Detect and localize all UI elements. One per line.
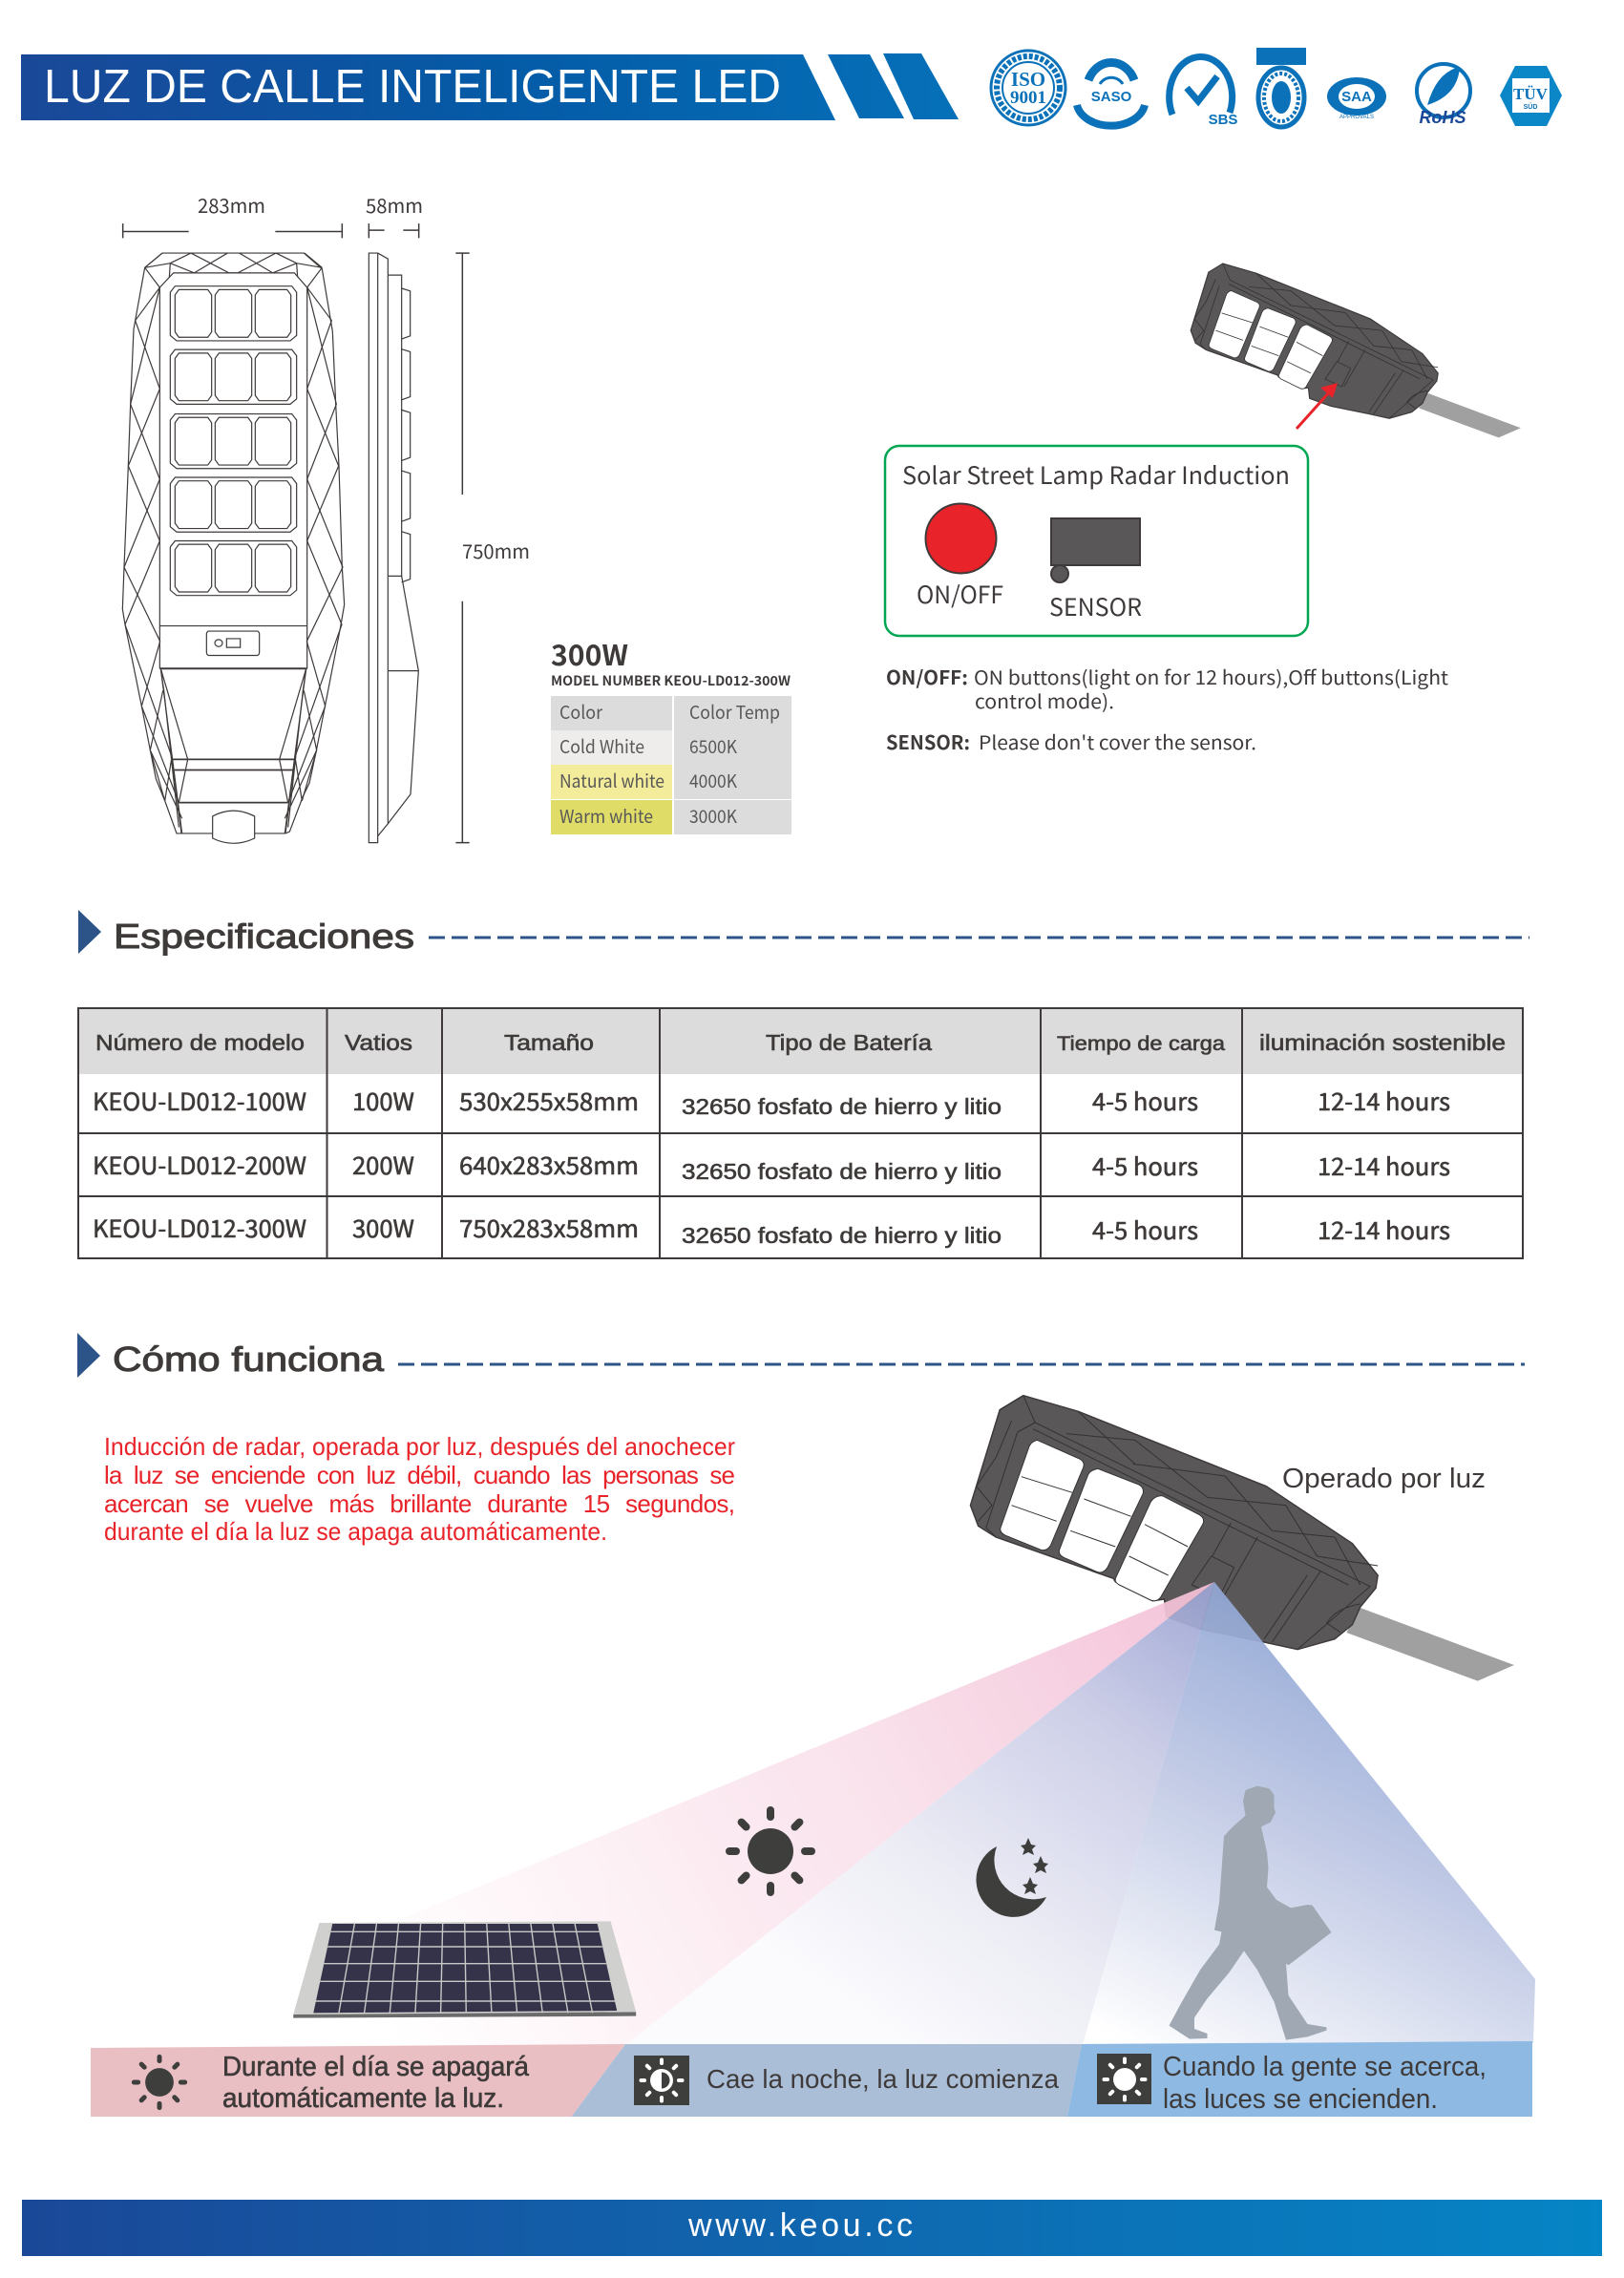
table row 200W: 640x283x58mm [459,1148,639,1182]
table cells: Color [559,699,603,725]
table cells: 4000K [689,768,738,793]
lamp pole [1346,1608,1514,1681]
red description paragraph: acercan se vuelve más brillante durante 15 segundos, [104,1489,735,1518]
button notes: ON/OFF: [886,663,968,690]
red arrow [1297,383,1338,429]
operated by light label: Operado por luz [1282,1464,1486,1494]
beam: day pink [90,1582,1214,2048]
lamp body [970,1396,1378,1650]
caption band: day: Durante el día se apagará [222,2052,530,2082]
certification logos [991,48,1562,128]
solar panel [293,1921,636,2018]
dimension label 58mm: 58mm [366,191,423,219]
logo: SAA: SAA [1341,89,1372,105]
on/off button [926,504,997,573]
dimension label 283mm: 283mm [198,191,265,219]
side view [369,253,418,843]
beam: dusk lavender [625,1582,1214,2045]
sensor label: SENSOR [1049,589,1142,623]
table header row: Número de modelo [95,1030,305,1055]
header title: LUZ DE CALLE INTELIGENTE LED [44,61,781,113]
section heading: especificaciones: Especificaciones [114,917,414,956]
table header row [95,1030,1506,1055]
logo: SBS check: SBS [1209,112,1237,128]
icon: moon and stars [976,1838,1048,1917]
caption band: people approach: Cuando la gente se acerca, [1163,2052,1487,2082]
table row 200W [93,1148,1450,1184]
table header background [78,1008,1523,1074]
logo: TUV [1500,66,1562,126]
table header row: Tiempo de carga [1057,1033,1225,1055]
sensor icon [1051,518,1140,582]
table row 100W [93,1084,1450,1119]
logo: RoHS [1417,64,1470,127]
walking person with briefcase [1169,1786,1331,2040]
logo: SBS check [1170,57,1237,128]
lamp line drawings [122,223,470,843]
table header row: iluminación sostenible [1259,1030,1506,1055]
dimension lines [123,223,470,843]
caption band: day: automáticamente la luz. [222,2083,504,2114]
logo: TUV: SÜD [1524,102,1537,111]
logo: seal with blue tab [1256,48,1306,127]
table row 300W: 4-5 hours [1092,1213,1198,1247]
front view [122,253,345,843]
button notes: SENSOR: [886,728,970,755]
table row 100W: 530x255x58mm [459,1084,639,1118]
red description paragraph: durante el día la luz se apaga automáticamente. [104,1517,607,1546]
caption band: people approach: las luces se encienden. [1163,2084,1438,2115]
table header row: Tamaño [504,1030,594,1055]
footer bar [22,2200,1602,2256]
footer bar: www.keou.cc [687,2207,913,2244]
logo: ISO 9001: 9001 [1010,88,1046,108]
sensor window [1192,1556,1234,1597]
table cells: Warm white [559,803,653,829]
table row 100W: 32650 fosfato de hierro y litio [682,1094,1002,1119]
table row 100W: KEOU-LD012-100W [93,1084,306,1118]
icon: small sun [132,2055,187,2110]
icon: big sun [726,1806,815,1896]
red description paragraph [104,1432,735,1546]
caption band: people approach [1067,2041,1532,2117]
table row 300W: 750x283x58mm [459,1211,639,1245]
section heading: como funciona: Cómo funciona [113,1339,385,1379]
logo: TUV: TÜV [1513,85,1549,103]
table row 200W: 200W [352,1148,414,1182]
logo: ISO 9001 [991,51,1065,125]
header banner [21,53,959,120]
table row 200W: 4-5 hours [1092,1149,1198,1183]
light beams [90,1582,1535,2048]
button notes: ON buttons(light on for 12 hours),Off buttons(Light [974,663,1448,690]
icon: bright sun [1097,2054,1151,2104]
caption band: dusk: Cae la noche, la luz comienza [707,2064,1059,2094]
on/off label: ON/OFF [917,577,1003,611]
table cells: Natural white [559,768,664,793]
logo: ISO 9001: ISO [1011,68,1045,91]
300W colour table [551,632,791,834]
logo: SASO: SASO [1091,89,1132,105]
table cells: Cold White [559,733,644,759]
table cells: Color Temp [689,699,780,725]
table row 300W: 12-14 hours [1318,1213,1450,1247]
table row 200W: 32650 fosfato de hierro y litio [682,1159,1002,1184]
table row 100W: 12-14 hours [1318,1084,1450,1118]
red description paragraph: la luz se enciende con luz débil, cuando las personas se [104,1461,735,1489]
table row 200W: KEOU-LD012-200W [93,1148,306,1182]
caption band: day [91,2044,625,2117]
table row 300W [93,1211,1450,1248]
button notes [886,663,1448,755]
panel title: Solar Street Lamp Radar Induction [902,457,1290,492]
table row 300W: 300W [352,1211,414,1245]
table row 200W: 12-14 hours [1318,1149,1450,1183]
table row 300W: KEOU-LD012-300W [93,1211,306,1245]
logo: SAA [1327,77,1386,120]
logo: SAA: APPROVALS [1339,115,1374,120]
button notes: control mode). [975,686,1114,714]
small lamp [1191,264,1521,437]
table row 100W: 100W [352,1084,414,1118]
table grid [78,1008,1523,1258]
specifications table [78,1008,1523,1258]
section heading: como funciona [77,1333,1525,1379]
logo: RoHS: RoHS [1419,108,1466,127]
large lamp [970,1396,1514,1681]
small lamp with red arrow [1191,264,1521,437]
icon: half sun [634,2056,689,2105]
red description paragraph: Inducción de radar, operada por luz, después del anochecer [104,1432,735,1461]
button notes: Please don't cover the sensor. [979,728,1256,755]
table cells [551,696,791,834]
table header row: Tipo de Batería [766,1030,932,1055]
dimension label 750mm: 750mm [462,537,530,564]
table cells: 3000K [689,803,738,829]
table row 100W: 4-5 hours [1092,1084,1198,1118]
dimension drawing [122,191,530,843]
lamp windows [1001,1440,1204,1601]
model number: MODEL NUMBER KEOU-LD012-300W [551,671,791,690]
beam: person blue [1083,1582,1535,2045]
table row 300W: 32650 fosfato de hierro y litio [682,1223,1002,1248]
lamp facets [977,1396,1378,1650]
caption band: dusk [571,2044,1082,2117]
section heading: especificaciones [78,910,1529,956]
table cells: 6500K [689,733,738,759]
radar induction panel [885,446,1308,636]
wattage heading: 300W [551,632,628,674]
logo: SASO [1077,63,1145,126]
table header row: Vatios [345,1030,412,1055]
